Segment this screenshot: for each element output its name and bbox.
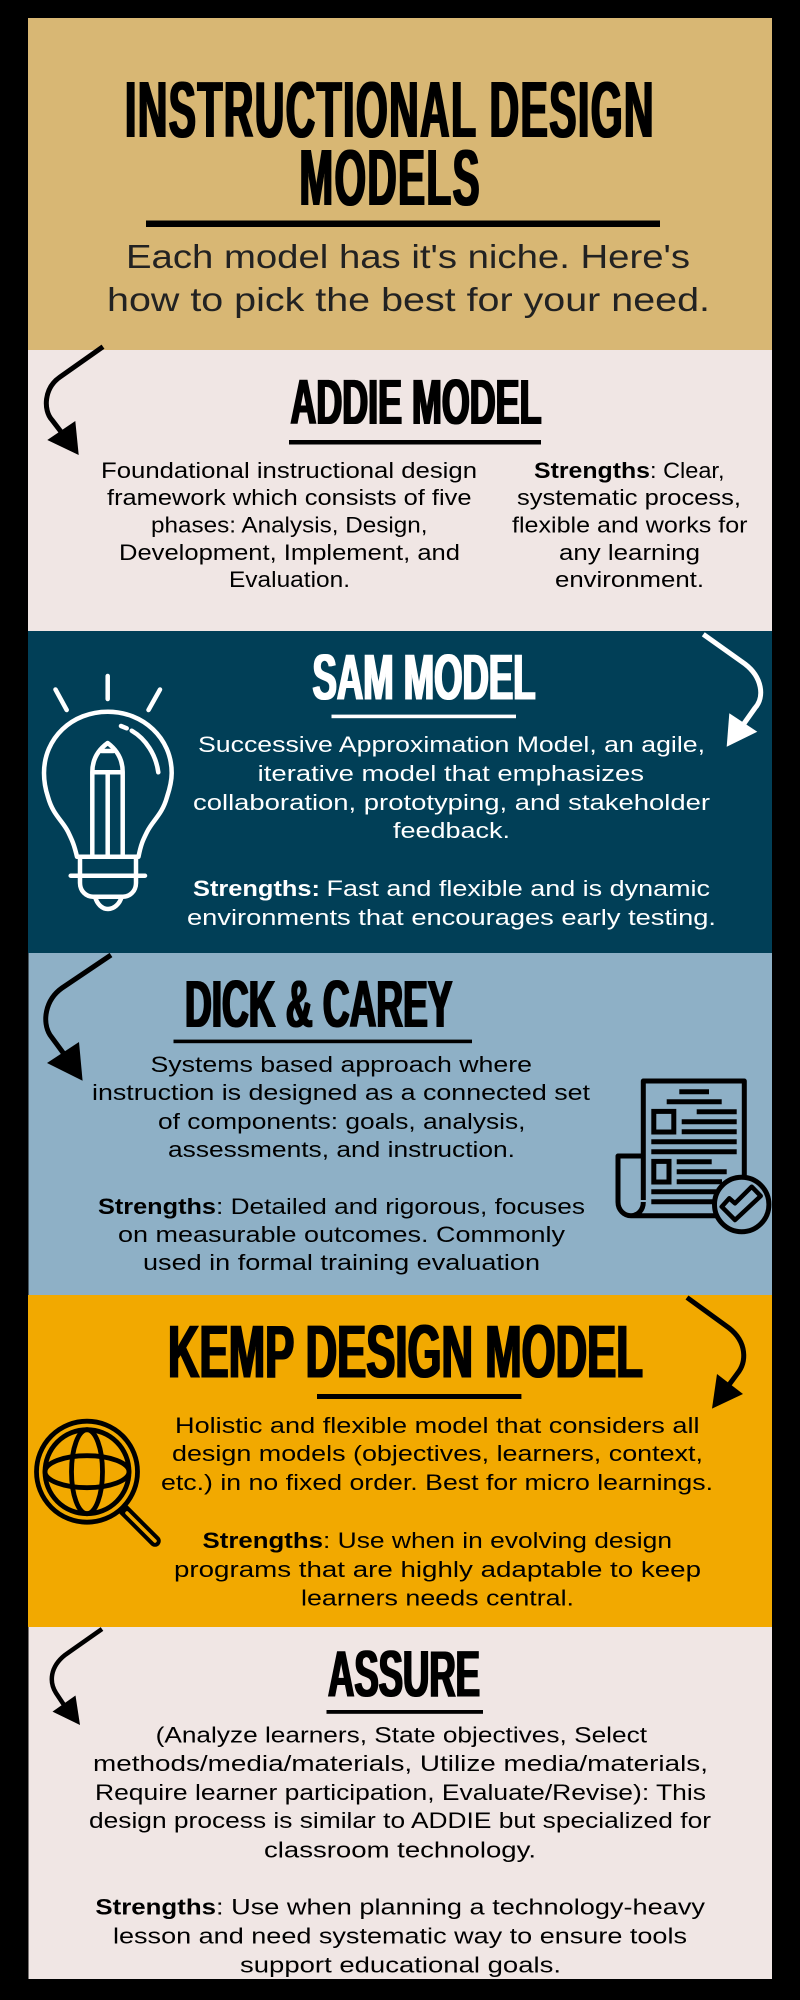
text: ADDIE description: Development, Implement, and [119,540,460,565]
title: MODELS [300,133,481,222]
text: ASSURE description: (Analyze learners, State objectives, Select [156,1722,647,1747]
arrow: ASSURE [52,1629,102,1725]
title [125,65,655,222]
text: Dick and Carey strengths: used in formal training evaluation [143,1250,540,1275]
text: ASSURE strengths: Strengths [95,1894,216,1920]
icon: magnifying glass with globe [36,1421,155,1541]
icon: document with check mark [618,1081,769,1232]
text: ADDIE strengths: Strengths [534,458,650,483]
text: ADDIE description: Foundational instructional design [101,458,477,483]
text: Kemp description: design models (objectives, learners, context, [172,1441,703,1466]
text: ADDIE strengths: environment. [555,567,704,592]
arrow: Dick and Carey [46,955,111,1081]
panel: Dick and Carey [28,953,772,1295]
text: ADDIE strengths [512,458,748,592]
heading: ASSURE: ASSURE [328,1636,480,1710]
text: Kemp description [161,1413,713,1495]
text: Kemp description: etc.) in no fixed order. Best for micro learnings. [161,1470,713,1495]
panel: header [28,18,772,350]
heading: Dick and Carey: DICK & CAREY [185,967,452,1042]
text: Kemp strengths [174,1528,701,1610]
text: ADDIE strengths: systematic process, [517,485,741,510]
text: ADDIE strengths: : Clear, [650,458,724,483]
text: Kemp strengths: Strengths [202,1528,323,1553]
arrow: ADDIE [46,347,103,455]
text: SAM description [193,732,710,843]
text: ASSURE description [89,1722,711,1863]
text: SAM strengths: Strengths: [193,876,320,901]
text: Dick and Carey strengths [98,1194,585,1275]
text: SAM description: feedback. [393,818,510,843]
text: ADDIE description: phases: Analysis, Design, [151,512,428,538]
text: SAM description: collaboration, prototyping, and stakeholder [193,790,710,815]
text: Kemp description: Holistic and flexible model that considers all [175,1413,700,1438]
text: SAM strengths [187,876,716,930]
subtitle: Each model has it's niche. Here's [126,239,690,276]
heading: SAM model: SAM MODEL [312,640,536,714]
text: Dick and Carey strengths: : Detailed and rigorous, focuses [216,1194,585,1219]
text: ADDIE description: framework which consists of five [107,485,472,510]
text: Dick and Carey strengths: on measurable outcomes. Commonly [118,1222,565,1247]
text: ASSURE description: methods/media/materials, Utilize media/materials, [93,1751,708,1776]
text: ASSURE description: classroom technology. [264,1838,536,1863]
heading: ADDIE model: ADDIE MODEL [290,366,542,438]
panel: SAM model [28,631,772,953]
text: ADDIE description [101,458,477,592]
text: Dick and Carey description: of components: goals, analysis, [158,1109,526,1134]
text: ADDIE strengths: flexible and works for [512,512,748,538]
text: ADDIE description: Evaluation. [229,567,350,592]
text: Kemp strengths: learners needs central. [301,1586,574,1610]
text: SAM description: iterative model that emphasizes [258,761,644,786]
subtitle: how to pick the best for your need. [107,282,710,319]
text: ASSURE strengths: support educational goals. [240,1952,561,1977]
text: SAM strengths: Fast and flexible and is dynamic [326,876,710,901]
arrow: SAM [703,634,761,747]
text: Kemp strengths: programs that are highly adaptable to keep [174,1557,701,1582]
icon: light bulb with pencil [44,676,172,909]
text: Kemp strengths: : Use when in evolving design [323,1528,672,1553]
arrow: Kemp [687,1298,744,1409]
text: ASSURE description: Require learner participation, Evaluate/Revise): This [95,1780,706,1805]
text: SAM strengths: environments that encourages early testing. [187,905,716,930]
panel: ASSURE [28,1627,772,1979]
text: Dick and Carey description: instruction is designed as a connected set [92,1080,590,1105]
text: Dick and Carey description [92,1052,590,1162]
text: ASSURE description: design process is similar to ADDIE but specialized for [89,1808,711,1833]
panel: ADDIE model [28,347,772,631]
text: Dick and Carey description: assessments, and instruction. [168,1137,515,1162]
subtitle [107,239,710,319]
text: ADDIE strengths: any learning [559,540,700,565]
panel: Kemp design model [28,1295,772,1627]
text: ASSURE strengths: lesson and need systematic way to ensure tools [113,1924,687,1948]
text: Dick and Carey description: Systems based approach where [150,1052,532,1077]
text: ASSURE strengths [95,1894,705,1977]
text: Dick and Carey strengths: Strengths [98,1194,216,1219]
text: SAM description: Successive Approximation Model, an agile, [198,732,705,757]
text: ASSURE strengths: : Use when planning a technology-heavy [216,1894,705,1920]
